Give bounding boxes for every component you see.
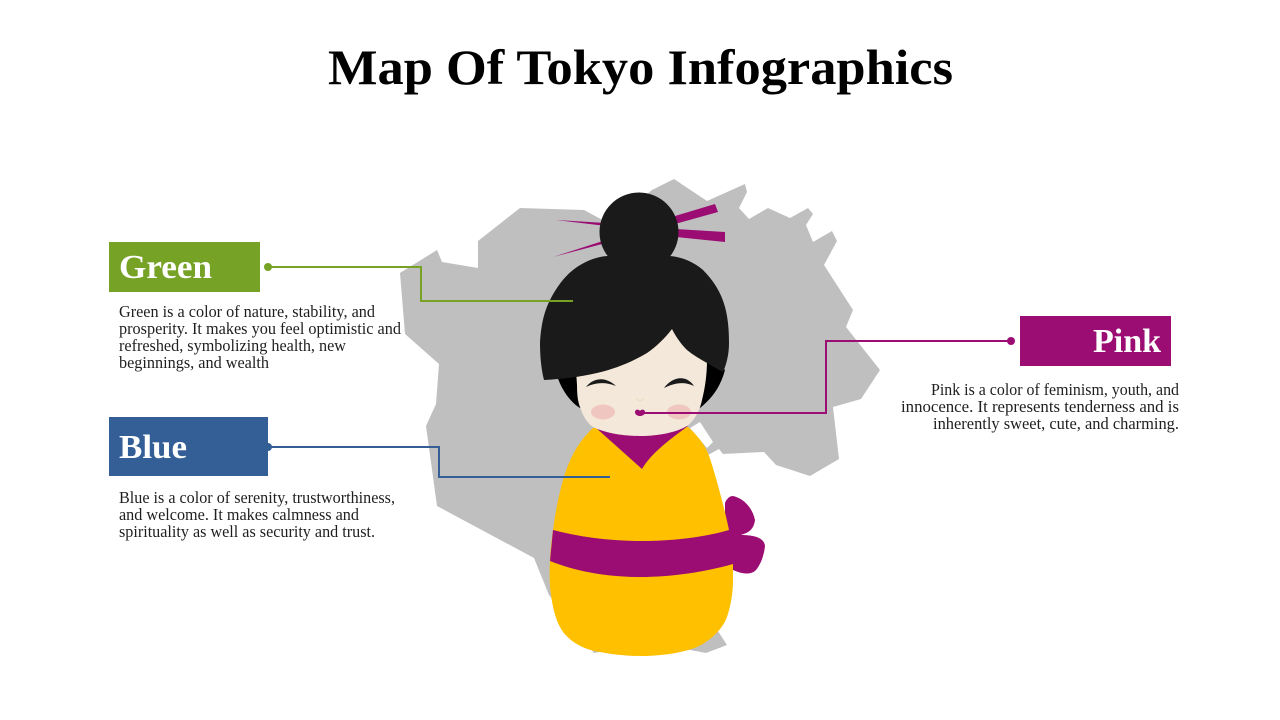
panel: blue: Blue (119, 429, 187, 466)
panel: pink: inherently sweet, cute, and charming. (933, 414, 1179, 433)
panel: green: beginnings, and wealth (119, 353, 270, 372)
cheeks (591, 404, 615, 420)
front hair (540, 256, 729, 380)
panel: pink: Pink (1093, 323, 1161, 360)
panel: blue (109, 417, 395, 541)
nose (636, 399, 644, 400)
hair bun (600, 192, 678, 272)
panel: green: Green (119, 249, 212, 286)
hair sticks (553, 204, 725, 257)
map of Tokyo (400, 179, 880, 653)
panel: green: refreshed, symbolizing health, new (119, 336, 346, 355)
panel: green (109, 242, 402, 372)
title: Map Of Tokyo Infographics (328, 39, 953, 95)
eyes (586, 379, 616, 387)
panel: green: prosperity. It makes you feel optimistic and (119, 319, 402, 338)
panel: pink: innocence. It represents tenderness and is (901, 397, 1179, 416)
connector: pink (640, 337, 1015, 413)
panel: pink (901, 316, 1180, 433)
figure: kimono girl (540, 192, 765, 656)
collar (595, 420, 688, 469)
panel: blue: spirituality as well as security and trust. (119, 522, 375, 541)
panel: green: Green is a color of nature, stability, and (119, 302, 376, 321)
panel: pink: Pink is a color of feminism, youth, and (931, 380, 1180, 399)
connector: green (264, 263, 573, 301)
panel: blue: and welcome. It makes calmness and (119, 505, 360, 524)
kimono body (550, 420, 765, 656)
back hair (556, 350, 725, 408)
sash (550, 530, 742, 577)
lips (635, 410, 645, 416)
sash bow (725, 496, 765, 574)
face (576, 325, 707, 436)
panel: blue: Blue is a color of serenity, trustworthiness, (119, 488, 395, 507)
connector: blue (268, 447, 610, 477)
